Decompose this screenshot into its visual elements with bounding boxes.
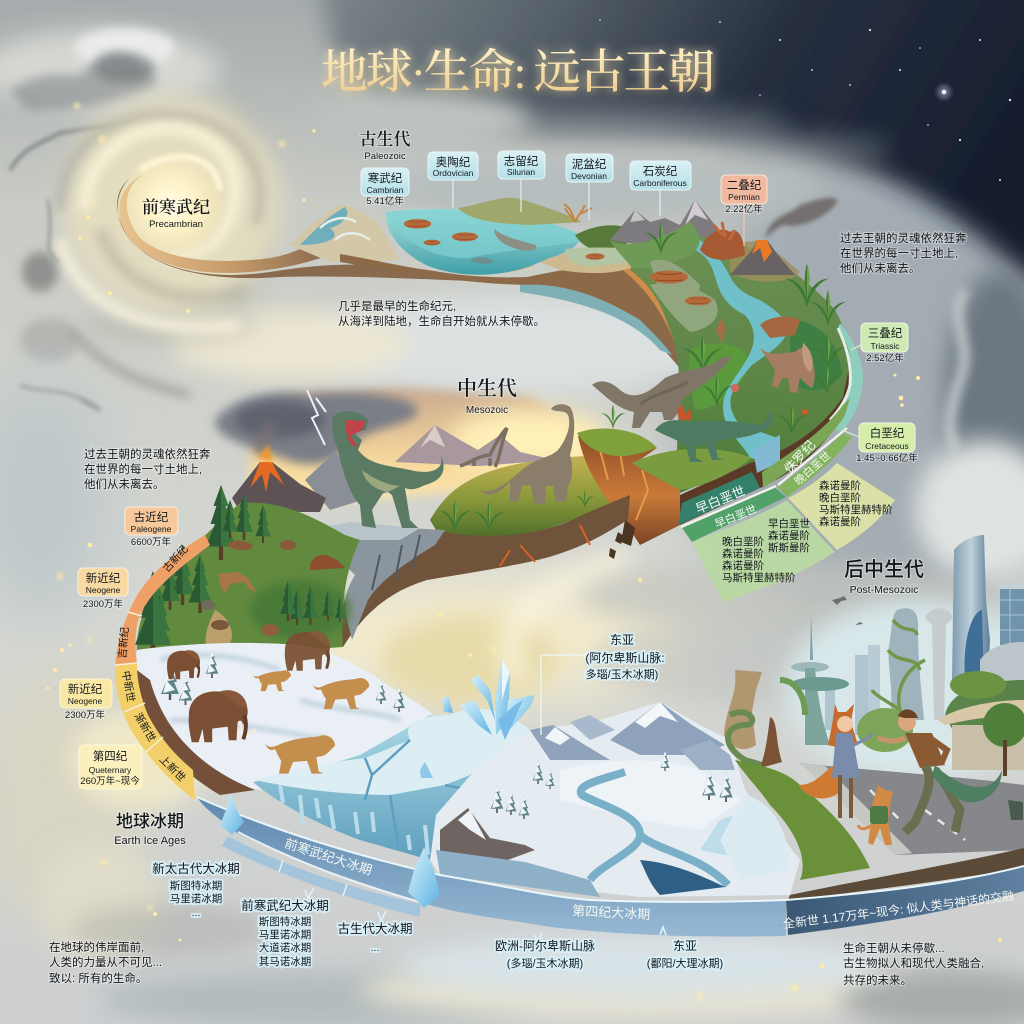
label: east asia upper: (阿尔卑斯山脉: — [585, 650, 665, 665]
text: bottom left dedication: 致以: 所有的生命。 — [49, 971, 147, 985]
leader line: east asia — [541, 652, 590, 735]
era heading: mesozoic — [457, 377, 517, 416]
card: paleogene: 6600万年 — [131, 536, 172, 548]
mesozoic lower earth shelf — [310, 495, 635, 647]
label: east asia upper: 东亚 — [610, 633, 634, 647]
text: left quote: 他们从未离去。 — [84, 477, 164, 491]
card: devonian — [566, 154, 613, 182]
left age band: 中新世 — [119, 670, 138, 703]
text: bottom right closing: 古生物拟人和现代人类融合, — [843, 956, 984, 970]
list: precambrian glaciation: 马里诺冰期 — [259, 928, 311, 941]
stage lists in wedges — [722, 479, 893, 584]
lizard tailed man — [878, 709, 1002, 832]
list: precambrian glaciation: 前寒武纪大冰期 — [241, 898, 329, 913]
card: neogene upper: Neogene — [86, 585, 121, 595]
label: europe alps: 欧洲-阿尔卑斯山脉 — [495, 938, 595, 953]
text: bottom right closing: 生命王朝从未停歇... — [843, 941, 945, 955]
text: bottom right closing — [843, 941, 984, 987]
card: cretaceous: 1.45~0.66亿年 — [856, 452, 918, 464]
right era bands: triassic, cretaceous, jurassic, early cretaceous: 早白垩世 — [693, 483, 747, 517]
dragon statue and dryad — [724, 670, 782, 768]
list: precambrian glaciation — [241, 898, 329, 968]
left age band: 吉新纪 — [116, 626, 131, 659]
list: paleozoic glaciation: ... — [371, 942, 379, 954]
cenozoic forest land — [135, 485, 360, 661]
ice age band: 第四纪大冰期 — [572, 903, 651, 922]
list: neoarchean glaciation: 马里诺冰期 — [170, 892, 222, 905]
card: neogene lower: 新近纪 — [68, 682, 103, 696]
card: quaternary: 260万年~现今 — [80, 775, 140, 787]
card: silurian — [498, 151, 545, 179]
triceratops — [760, 343, 815, 393]
card: paleogene: Paleogene — [131, 524, 172, 534]
stage lists in wedges: 斯斯曼阶 — [768, 541, 810, 554]
text: paleozoic caption: 几乎是最早的生命纪元, — [338, 299, 456, 313]
precambrian spiral vortex — [60, 95, 282, 327]
label: east asia upper: 多瑙/玉木冰期) — [586, 667, 658, 681]
era heading: mesozoic: Mesozoic — [466, 405, 508, 416]
card: cambrian: 寒武纪 — [368, 171, 403, 185]
ice age snowfield — [136, 643, 440, 795]
card: carboniferous — [630, 161, 691, 190]
card: neogene upper — [78, 568, 128, 610]
card: neogene upper: 2300万年 — [83, 598, 124, 610]
young fox child — [858, 785, 893, 845]
text: bottom left dedication: 人类的力量从不可见... — [49, 955, 162, 969]
ice age band: 前寒武纪大冰期 — [283, 836, 374, 878]
era heading: paleozoic: 古生代 — [360, 130, 410, 149]
text: paleozoic caption — [338, 299, 545, 328]
sauropod — [480, 404, 574, 504]
text: paleozoic caption: 从海洋到陆地，生命自开始就从未停歇。 — [338, 314, 545, 328]
left age band: 渐新世 — [132, 710, 159, 744]
card: paleogene — [125, 507, 178, 548]
label: europe alps — [495, 938, 595, 970]
card: triassic: Triassic — [871, 341, 900, 351]
card: cretaceous: 白垩纪 — [870, 426, 905, 440]
stage lists in wedges: 森诺曼阶 — [819, 515, 861, 528]
stage lists in wedges: 森诺曼阶 — [819, 479, 861, 492]
fox girl — [798, 704, 872, 818]
era heading: post-mesozoic: Post-Mesozoic — [850, 584, 918, 596]
mammoths and sabre cats — [167, 631, 369, 774]
small crystals on band — [220, 794, 440, 908]
green verge and lower ground — [720, 760, 1024, 900]
list: neoarchean glaciation: 斯图特冰期 — [170, 879, 222, 892]
right era bands: triassic, cretaceous, jurassic, early cretaceous: 早白垩世 — [712, 502, 759, 531]
card: permian: 二叠纪 — [727, 179, 762, 192]
post-mesozoic city — [780, 535, 1024, 780]
era heading: paleozoic: Paleozoic — [364, 151, 406, 162]
text: bottom right closing: 共存的未来。 — [843, 973, 912, 987]
card: cretaceous — [856, 423, 918, 464]
stage lists in wedges: 森诺曼阶 — [722, 547, 764, 560]
list: neoarchean glaciation — [152, 861, 240, 919]
era heading: earth ice ages: Earth Ice Ages — [114, 835, 186, 847]
list: precambrian glaciation: 大道诺冰期 — [259, 941, 311, 954]
right era bands: triassic, cretaceous, jurassic, early cretaceous: 侏罗纪 — [781, 437, 818, 477]
paleozoic creatures and vegetation — [404, 204, 846, 444]
card: triassic — [861, 323, 908, 364]
card: carboniferous: 石炭纪 — [643, 165, 678, 178]
era heading: earth ice ages: 地球冰期 — [116, 812, 184, 831]
era heading: earth ice ages — [114, 812, 186, 847]
card: neogene lower: 2300万年 — [65, 709, 106, 721]
label: east asia lower: (鄱阳/大理冰期) — [647, 956, 723, 970]
card: ordovician — [428, 152, 478, 180]
card: quaternary: Queternary — [89, 765, 132, 775]
left age band — [115, 535, 210, 800]
label: east asia lower: 东亚 — [673, 939, 697, 953]
t-rex — [332, 411, 444, 528]
card: permian — [721, 175, 767, 215]
card: quaternary — [79, 745, 142, 789]
mesozoic distant scene — [215, 388, 630, 538]
card: permian: Permian — [728, 192, 760, 202]
era heading: precambrian: 前寒武纪 — [142, 197, 210, 217]
left age band: 古新纪 — [160, 542, 191, 575]
road — [800, 763, 1024, 855]
era heading: post-mesozoic: 后中生代 — [844, 558, 924, 581]
left age band: 上新世 — [157, 753, 188, 784]
card: neogene lower — [60, 679, 112, 721]
era heading: precambrian — [142, 197, 210, 230]
card: cambrian — [361, 168, 409, 207]
era heading: paleozoic — [360, 130, 410, 162]
text: left quote: 在世界的每一寸土地上, — [84, 462, 202, 476]
text: right top quote: 他们从未离去。 — [840, 261, 920, 275]
stage lists in wedges: 马斯特里赫特阶 — [819, 503, 893, 516]
stage lists in wedges: 森诺曼阶 — [722, 559, 764, 572]
card: neogene upper: 新近纪 — [86, 571, 121, 585]
stage lists in wedges: 晚白垩阶 — [722, 535, 764, 548]
permian volcano with smoke — [700, 198, 838, 275]
card: silurian: Silurian — [507, 167, 535, 177]
stems for period labels — [453, 178, 861, 437]
stage lists in wedges: 晚白垩阶 — [819, 491, 861, 504]
list: neoarchean glaciation: 新太古代大冰期 — [152, 861, 240, 876]
stage lists in wedges: 森诺曼阶 — [768, 529, 810, 542]
snowy mountains and river — [430, 702, 800, 897]
green dinosaur — [655, 405, 772, 462]
card: devonian: Devonian — [571, 171, 607, 181]
card: ordovician: 奥陶纪 — [436, 155, 471, 169]
card: silurian: 志留纪 — [504, 155, 539, 168]
list: paleozoic glaciation — [337, 921, 413, 954]
stage lists in wedges: 早白垩世 — [768, 517, 810, 530]
card: neogene lower: Neogene — [68, 696, 103, 706]
right era bands: triassic, cretaceous, jurassic, early cretaceous — [678, 323, 895, 602]
text: left quote: 过去王朝的灵魂依然狂奔 — [84, 447, 211, 461]
giant blue crystal — [442, 659, 535, 740]
canyon cliffs — [577, 428, 752, 545]
ice age band — [197, 797, 1024, 945]
era heading: post-mesozoic — [844, 558, 924, 596]
paleozoic strip: rock tail, sea and land — [117, 172, 851, 525]
long neck dinosaur on plateau — [592, 356, 732, 428]
card: triassic: 2.52亿年 — [866, 352, 904, 364]
list: precambrian glaciation: 其马诺冰期 — [259, 955, 311, 968]
card: cambrian: 5.41亿年 — [366, 195, 404, 207]
text: right top quote — [840, 231, 967, 275]
card: cretaceous: Cretaceous — [865, 441, 909, 451]
text: bottom left dedication — [49, 940, 162, 985]
title: 地球·生命: 远古王朝 — [321, 47, 715, 99]
card: permian: 2.22亿年 — [725, 203, 763, 215]
era heading: mesozoic: 中生代 — [457, 377, 517, 400]
card: triassic: 三叠纪 — [868, 327, 903, 340]
card: paleogene: 古近纪 — [134, 510, 169, 524]
ice age band: 全新世 1.17万年~现今: 似人类与神话的交融 — [782, 888, 1015, 931]
stage lists in wedges: 马斯特里赫特阶 — [722, 571, 796, 584]
ice shelf and blocks — [253, 709, 530, 860]
text: right top quote: 过去王朝的灵魂依然狂奔 — [840, 231, 967, 245]
list: neoarchean glaciation: ... — [192, 907, 200, 919]
card: ordovician: Ordovician — [433, 168, 474, 178]
list: precambrian glaciation: 斯图特冰期 — [259, 915, 311, 928]
card: carboniferous: Carboniferous — [633, 178, 687, 188]
starfield — [599, 19, 1011, 181]
label: europe alps: (多瑙/玉木冰期) — [507, 956, 583, 970]
card: devonian: 泥盆纪 — [572, 157, 607, 171]
era heading: precambrian: Precambrian — [149, 219, 203, 230]
list: paleozoic glaciation: 古生代大冰期 — [337, 921, 413, 936]
card: cambrian: Cambrian — [367, 185, 404, 195]
text: left quote — [84, 447, 211, 491]
label: east asia upper — [585, 633, 665, 681]
card: quaternary: 第四纪 — [93, 749, 128, 763]
text: right top quote: 在世界的每一寸土地上, — [840, 246, 958, 260]
label: east asia lower — [647, 939, 723, 970]
cenozoic volcano — [232, 425, 326, 512]
right era bands: triassic, cretaceous, jurassic, early cretaceous: 晚白垩世 — [791, 448, 833, 488]
text: bottom left dedication: 在地球的伟岸面前, — [49, 940, 144, 954]
